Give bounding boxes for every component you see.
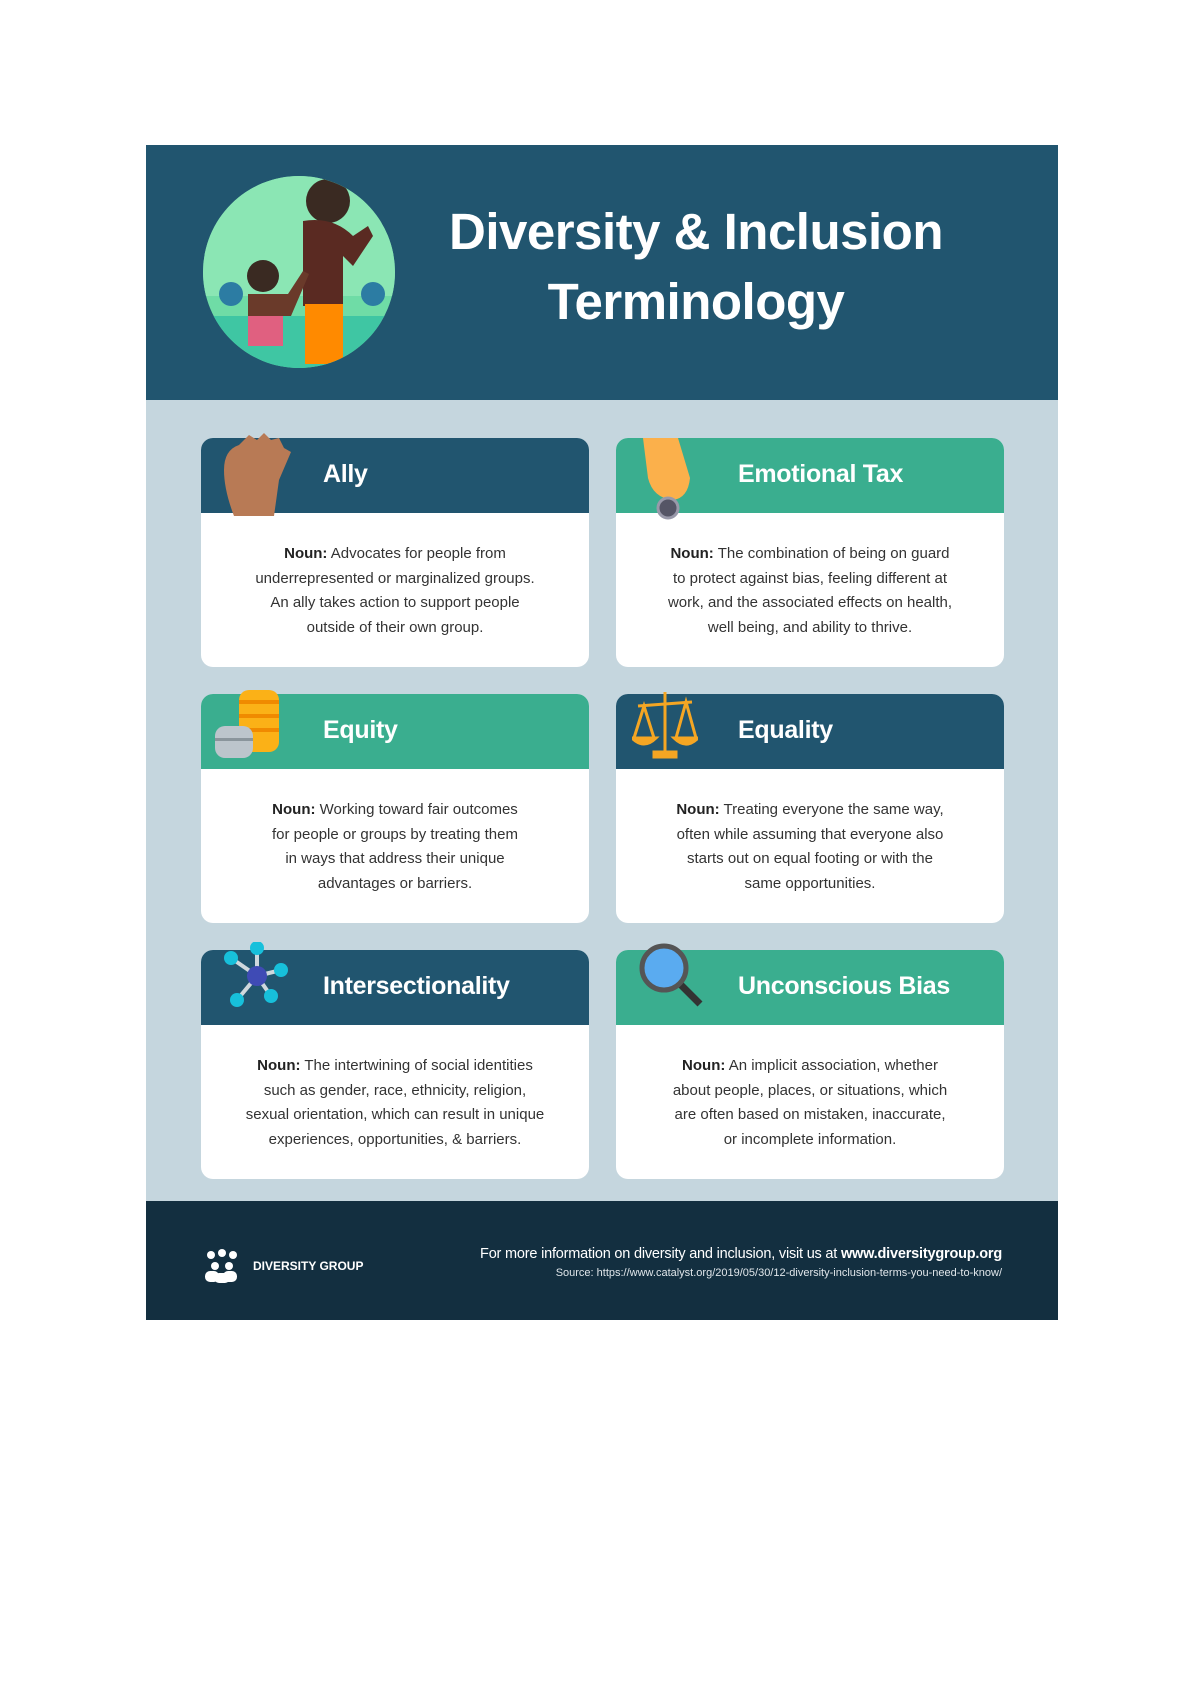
- card: Equity: in ways that address their unique: [285, 850, 505, 867]
- card: Equity: Equity: [323, 716, 398, 744]
- card: Emotional Tax: Noun: The combination of being on guard: [670, 545, 950, 562]
- logo: diversity group: [205, 1249, 364, 1283]
- header banner: [146, 145, 1058, 400]
- card: Equality: starts out on equal footing or with the: [687, 850, 933, 867]
- card: Intersectionality: Intersectionality: [323, 972, 510, 1000]
- card: Emotional Tax: well being, and ability to thrive.: [708, 618, 912, 636]
- card: Intersectionality: [201, 950, 589, 1179]
- card: Ally: [201, 438, 589, 667]
- card: Unconscious Bias: are often based on mistaken, inaccurate,: [674, 1106, 946, 1123]
- card: Equity: Noun: Working toward fair outcomes: [272, 801, 518, 818]
- card: Unconscious Bias: Noun: An implicit association, whether: [682, 1057, 938, 1074]
- card: Equality: same opportunities.: [745, 874, 875, 892]
- footer: [146, 1201, 1058, 1320]
- card: Intersectionality: sexual orientation, which can result in unique: [246, 1106, 544, 1123]
- icon: coins: [215, 690, 279, 758]
- card: Ally: Noun: Advocates for people from: [284, 545, 506, 562]
- card: Unconscious Bias: [616, 950, 1004, 1179]
- card: Equality: [616, 694, 1004, 923]
- card: Ally: Ally: [323, 460, 368, 488]
- card: Emotional Tax: to protect against bias, feeling different at: [673, 570, 947, 586]
- card: Equality: Equality: [738, 716, 833, 744]
- card: Equity: advantages or barriers.: [318, 874, 472, 892]
- card: Ally: underrepresented or marginalized groups.: [255, 570, 535, 586]
- card: Unconscious Bias: about people, places, or situations, which: [673, 1082, 947, 1098]
- card: Emotional Tax: work, and the associated effects on health,: [668, 594, 952, 611]
- card: Emotional Tax: [616, 438, 1004, 667]
- icon: hand with coin: [643, 438, 690, 520]
- footer text: For more information on diversity and inclusion, visit us at www.diversitygroup.org: [480, 1246, 1002, 1262]
- title: Diversity & Inclusion: [449, 203, 943, 260]
- card: Equity: [201, 694, 589, 923]
- card: Equality: often while assuming that everyone also: [677, 826, 943, 842]
- title: Terminology: [548, 273, 844, 330]
- card: Equity: for people or groups by treating them: [272, 826, 518, 842]
- logo: diversity group: DIVERSITY GROUP: [253, 1259, 363, 1273]
- footer text: Source: https://www.catalyst.org/2019/05/30/12-diversity-inclusion-terms-you-need-to-know/: [556, 1267, 1002, 1279]
- illustration: parent and child: [203, 176, 395, 368]
- card: Emotional Tax: Emotional Tax: [738, 460, 903, 488]
- card: Equality: Noun: Treating everyone the same way,: [676, 801, 944, 818]
- icon: network: [224, 942, 288, 1007]
- icon: fist: [224, 433, 291, 516]
- card: Ally: outside of their own group.: [307, 618, 483, 636]
- icon: magnifier: [640, 944, 702, 1006]
- card: Intersectionality: such as gender, race, ethnicity, religion,: [264, 1082, 526, 1098]
- title: [449, 203, 943, 330]
- card: Ally: An ally takes action to support people: [270, 594, 520, 611]
- card: Unconscious Bias: or incomplete information.: [724, 1130, 896, 1148]
- footer text: [480, 1246, 1002, 1279]
- card: Intersectionality: experiences, opportunities, & barriers.: [269, 1130, 521, 1148]
- icon: scales: [632, 692, 698, 758]
- card: Unconscious Bias: Unconscious Bias: [738, 972, 950, 1000]
- card: Intersectionality: Noun: The intertwining of social identities: [257, 1057, 533, 1074]
